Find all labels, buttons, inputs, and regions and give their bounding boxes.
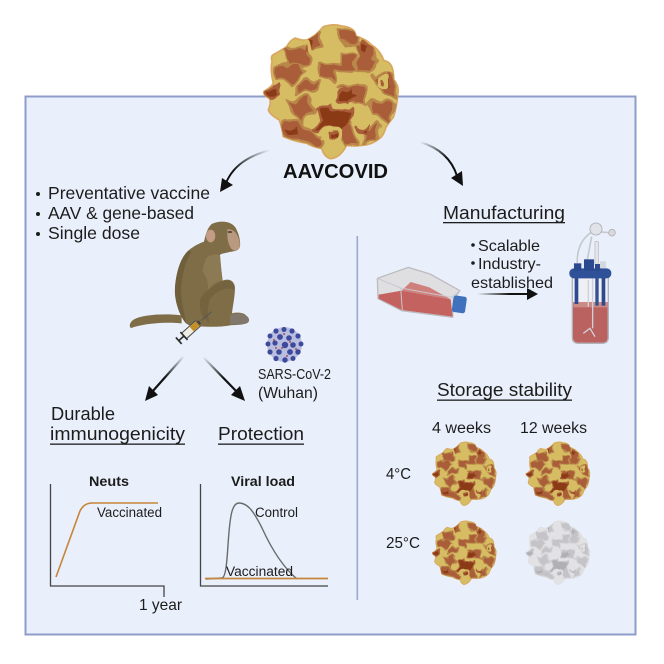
icon: bioreactor — [569, 223, 615, 343]
icon: particle 4C 12 weeks — [526, 442, 590, 506]
icon: large AAV particle — [264, 25, 398, 159]
text block: vaccine properties: Preventative vaccine — [48, 183, 210, 203]
column labels: storage time: 4 weeks — [432, 420, 491, 437]
row labels: storage temperature — [386, 466, 420, 552]
column labels: storage time — [432, 420, 587, 437]
heading: storage stability: Storage stability — [437, 379, 573, 400]
heading: durable immunogenicity: immunogenicity — [50, 423, 186, 444]
arrow: flask to bioreactor — [477, 288, 538, 300]
row labels: storage temperature: 4°C — [386, 466, 411, 483]
text block: manufacturing properties: Scalable — [478, 238, 540, 255]
text block: manufacturing properties: Industry- — [478, 256, 541, 273]
text block: vaccine properties — [36, 183, 210, 243]
text block: manufacturing properties: established — [471, 275, 553, 292]
icon: degraded particle 25C 12 weeks — [526, 521, 590, 585]
icon: particle 4C 4 weeks — [432, 442, 496, 506]
icon: culture flask — [377, 267, 467, 317]
heading: durable immunogenicity: Durable — [51, 403, 115, 424]
label: SARS-CoV-2: (Wuhan) — [258, 385, 318, 402]
heading: manufacturing: Manufacturing — [443, 202, 565, 223]
label: SARS-CoV-2: SARS-CoV-2 — [258, 367, 331, 383]
divider — [356, 236, 358, 600]
text block: vaccine properties: AAV & gene-based — [48, 203, 194, 223]
panel: main background frame — [26, 96, 636, 634]
text block: vaccine properties: Single dose — [48, 223, 140, 243]
heading: durable immunogenicity — [50, 403, 186, 445]
icon: syringe — [175, 312, 212, 345]
icon: SARS-CoV-2 particle — [266, 327, 304, 363]
column labels: storage time: 12 weeks — [520, 420, 587, 437]
chart: viral load — [200, 473, 328, 586]
text block: manufacturing properties — [471, 238, 553, 292]
chart: viral load: Control — [255, 505, 298, 520]
icon: macaque — [130, 222, 249, 328]
arrow: title to left branch — [220, 150, 270, 192]
chart: neuts: 1 year — [139, 597, 183, 614]
chart: neuts — [50, 473, 183, 614]
chart title: neuts: Neuts — [89, 473, 129, 489]
arrow: to protection — [203, 357, 245, 401]
arrow: title to manufacturing — [420, 142, 463, 186]
row labels: storage temperature: 25°C — [386, 535, 420, 552]
arrow: to durable immunogenicity — [145, 356, 184, 401]
label: SARS-CoV-2 — [258, 367, 331, 402]
chart: viral load: Vaccinated — [226, 564, 293, 579]
title: AAVCOVID — [283, 161, 388, 183]
heading: protection: Protection — [218, 423, 304, 444]
icon: particle 25C 4 weeks — [432, 521, 496, 585]
chart: neuts: Vaccinated — [97, 505, 162, 520]
chart title: viral load: Viral load — [231, 473, 295, 489]
